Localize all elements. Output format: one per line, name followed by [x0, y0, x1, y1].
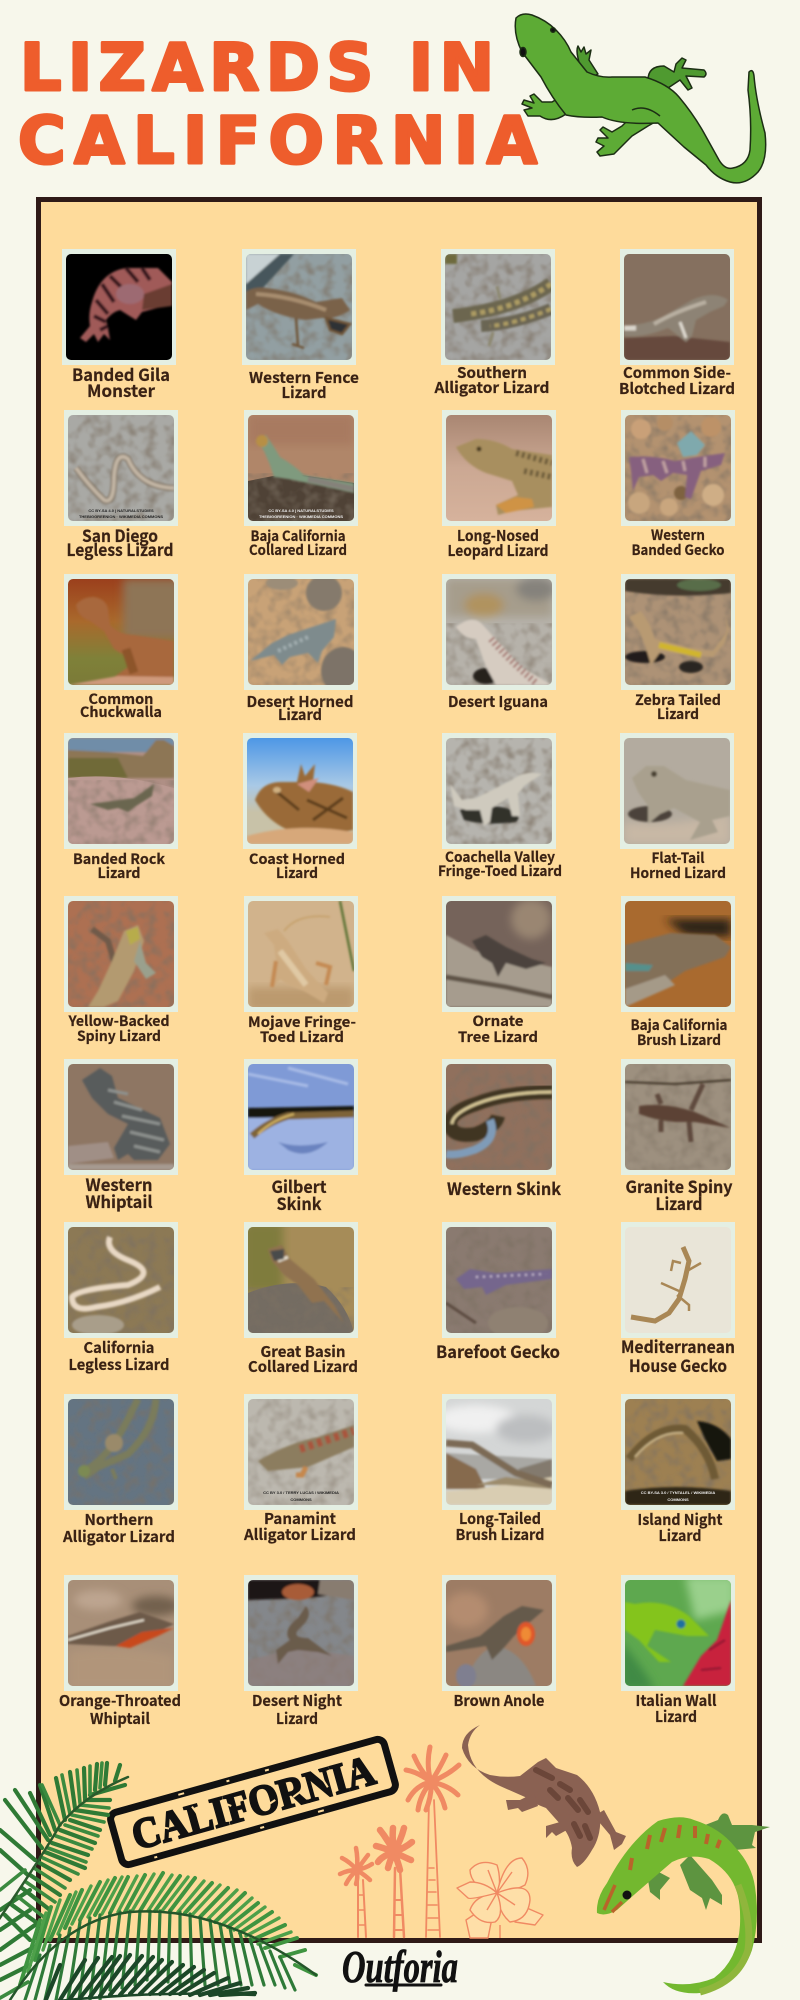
caption: House Gecko	[629, 1353, 727, 1377]
caption: Lizard	[276, 1708, 318, 1729]
caption: Panamint	[264, 1508, 337, 1529]
caption: Banded Gecko	[632, 540, 725, 560]
stamp: California: CALIFORNIA	[127, 1747, 380, 1860]
caption: Alligator Lizard	[243, 1524, 356, 1545]
card: Long-Nosed Leopard Lizard	[442, 410, 556, 561]
caption	[248, 1341, 358, 1377]
card: Common Side-Blotched Lizard	[619, 249, 735, 399]
caption	[80, 689, 162, 722]
illustration: brown gecko	[462, 1725, 626, 1867]
caption	[635, 690, 721, 724]
caption: Whiptail	[86, 1189, 152, 1213]
caption: Lizard	[656, 1191, 702, 1215]
caption	[59, 1690, 181, 1729]
short palm	[340, 1848, 372, 1937]
photo	[244, 1059, 358, 1175]
caption	[243, 1508, 356, 1545]
caption: Lizard	[658, 1525, 702, 1546]
caption	[636, 1690, 717, 1727]
photo	[244, 1575, 358, 1691]
photo: THEBIGGREENION · WIKIMEDIA COMMONS	[259, 514, 343, 519]
caption: Alligator Lizard	[62, 1526, 175, 1547]
illustration: palm fronds	[0, 1763, 316, 2000]
photo	[620, 249, 734, 365]
caption: Long-Tailed	[459, 1508, 541, 1529]
photo: COMMONS	[667, 1497, 689, 1502]
caption: Collared Lizard	[248, 1356, 358, 1377]
card: San Diego Legless Lizard	[64, 410, 178, 561]
card: Banded Gila Monster	[62, 249, 176, 402]
card: Granite Spiny Lizard	[621, 1059, 735, 1215]
card: Desert Horned Lizard	[244, 574, 365, 725]
frond: bottom dark	[40, 1955, 255, 2000]
photo	[243, 1222, 358, 1338]
photo: CC BY-SA 4.0 | NATURALSTUDIES	[268, 508, 334, 513]
photo: CC BY 3.0 / TERRY LUCAS / WIKIMEDIA	[263, 1490, 339, 1495]
caption: Baja California	[250, 526, 346, 546]
caption	[630, 848, 726, 883]
caption: Legless Lizard	[68, 1354, 170, 1375]
caption: Zebra Tailed	[635, 690, 721, 710]
caption: Blotched Lizard	[619, 378, 735, 399]
title	[18, 31, 537, 179]
title: CALIFORNIA	[18, 104, 537, 179]
photo	[621, 1222, 735, 1338]
caption: Island Night	[638, 1509, 723, 1530]
caption: Lizard	[278, 704, 322, 725]
card: Panamint Alligator Lizard	[243, 1394, 358, 1545]
illustration: palm trees	[340, 1747, 459, 1937]
photo	[64, 410, 178, 526]
caption	[68, 1337, 170, 1375]
photo	[442, 410, 556, 526]
caption: California	[84, 1337, 154, 1358]
caption: Common	[88, 689, 154, 709]
caption	[272, 1174, 327, 1215]
card: Southern Alligator Lizard	[433, 249, 555, 398]
caption: Desert Iguana	[448, 691, 548, 712]
card: Western Banded Gecko	[621, 410, 735, 560]
card: Brown Anole	[442, 1575, 556, 1711]
photo	[442, 1575, 556, 1691]
caption: Tree Lizard	[458, 1027, 538, 1047]
card: Northern Alligator Lizard	[62, 1394, 178, 1547]
frond: upper left	[0, 1763, 128, 1998]
card: Italian Wall Lizard	[620, 1575, 735, 1727]
caption: Mojave Fringe-	[248, 1012, 356, 1032]
caption: Lizard	[98, 863, 140, 883]
caption: Horned Lizard	[630, 863, 726, 883]
caption: Lizard	[657, 704, 699, 724]
icon: green lizard top right	[515, 14, 766, 183]
caption: Fringe-Toed Lizard	[438, 861, 562, 881]
photo	[244, 574, 365, 695]
caption: Flat-Tail	[652, 848, 705, 868]
caption: Leopard Lizard	[448, 540, 548, 561]
caption: Great Basin	[260, 1341, 346, 1362]
card: Orange-Throated Whiptail	[59, 1575, 181, 1729]
caption: Banded Rock	[73, 849, 166, 869]
caption	[249, 367, 359, 403]
caption	[458, 1011, 538, 1047]
caption: Western	[86, 1172, 152, 1196]
card: Desert Night Lizard	[244, 1575, 358, 1729]
photo	[621, 574, 735, 690]
caption: Legless Lizard	[66, 537, 174, 561]
caption	[246, 691, 354, 725]
card: Desert Iguana	[442, 574, 556, 712]
caption: Desert Night	[252, 1690, 343, 1711]
caption: Ornate	[472, 1011, 524, 1031]
card: Coachella Valley Fringe-Toed Lizard	[438, 733, 562, 881]
caption: Lizard	[276, 863, 318, 883]
caption	[621, 1334, 735, 1377]
caption	[632, 525, 725, 560]
caption	[72, 362, 170, 402]
caption	[433, 362, 550, 398]
card: California Legless Lizard	[64, 1222, 178, 1375]
caption: Desert Horned	[246, 691, 354, 712]
card: Baja California Collared Lizard	[244, 410, 358, 560]
caption: Italian Wall	[636, 1690, 717, 1711]
photo: CC BY-SA 4.0 | NATURALSTUDIES	[88, 508, 154, 513]
card: Zebra Tailed Lizard	[621, 574, 735, 724]
caption: Long-Nosed	[457, 525, 539, 546]
photo	[441, 249, 555, 365]
card: Flat-Tail Horned Lizard	[620, 733, 734, 883]
panel: lizard grid background	[38, 200, 760, 1940]
card: Great Basin Collared Lizard	[243, 1222, 358, 1377]
card: Ornate Tree Lizard	[442, 896, 556, 1047]
card: Baja California Brush Lizard	[621, 896, 735, 1050]
caption: Coast Horned	[249, 849, 345, 869]
caption	[630, 1015, 728, 1050]
photo	[64, 1059, 178, 1175]
caption: Western Fence	[249, 367, 359, 388]
photo	[64, 1575, 180, 1691]
caption: Alligator Lizard	[433, 377, 550, 398]
caption	[456, 1508, 544, 1545]
photo	[442, 574, 556, 690]
photo	[442, 1222, 556, 1339]
caption: Banded Gila	[72, 362, 170, 386]
caption	[73, 849, 166, 883]
card: Yellow-Backed Spiny Lizard	[64, 896, 178, 1046]
photo	[64, 1394, 178, 1510]
caption: Lizard	[655, 1706, 697, 1727]
caption	[638, 1509, 723, 1546]
photo	[242, 249, 356, 365]
caption	[626, 1174, 733, 1215]
card: Western Fence Lizard	[242, 249, 359, 403]
caption: Coachella Valley	[445, 847, 555, 867]
photo	[436, 1394, 556, 1510]
caption: Skink	[276, 1191, 322, 1215]
card: Island Night Lizard	[621, 1394, 735, 1546]
frond: middle arching	[10, 1873, 316, 2000]
card: Mojave Fringe-Toed Lizard	[244, 896, 358, 1047]
caption	[252, 1690, 343, 1729]
caption: Brush Lizard	[637, 1030, 721, 1050]
photo	[621, 1059, 735, 1175]
caption: Spiny Lizard	[77, 1026, 161, 1046]
caption: San Diego	[82, 523, 158, 547]
card: Western Skink	[442, 1059, 561, 1200]
photo	[244, 896, 358, 1012]
photo	[442, 733, 556, 849]
caption	[66, 523, 174, 561]
caption: Southern	[457, 362, 527, 383]
card: Banded Rock Lizard	[64, 733, 178, 883]
card: Mediterranean House Gecko	[621, 1222, 735, 1377]
photo	[64, 1222, 178, 1338]
card: Western Whiptail	[64, 1059, 178, 1213]
tall palm	[406, 1747, 459, 1937]
caption: Gilbert	[272, 1174, 327, 1198]
photo	[620, 733, 734, 849]
caption	[619, 362, 735, 399]
caption: Mediterranean	[621, 1334, 735, 1358]
photo	[442, 896, 556, 1012]
photo	[243, 733, 357, 849]
caption	[249, 526, 347, 560]
caption: Northern	[84, 1509, 154, 1530]
card: Barefoot Gecko	[436, 1222, 560, 1363]
illustration: hibiscus flower	[457, 1858, 543, 1938]
caption: Brown Anole	[454, 1690, 545, 1711]
photo	[64, 733, 178, 849]
card: Common Chuckwalla	[64, 574, 183, 722]
caption	[67, 1011, 170, 1046]
caption: Orange-Throated	[59, 1690, 181, 1711]
caption: Baja California	[630, 1015, 728, 1035]
caption: Yellow-Backed	[67, 1011, 170, 1031]
caption: Lizard	[282, 382, 326, 403]
card: Long-Tailed Brush Lizard	[436, 1394, 556, 1545]
card: Gilbert Skink	[244, 1059, 358, 1215]
caption: Monster	[87, 378, 156, 402]
photo	[621, 896, 735, 1012]
photo	[442, 1059, 556, 1175]
photo: THEBIGGREENION · WIKIMEDIA COMMONS	[79, 514, 163, 519]
photo	[621, 410, 735, 526]
caption: Western	[651, 525, 705, 545]
caption: Collared Lizard	[249, 540, 347, 560]
middle palm	[376, 1828, 412, 1937]
caption	[438, 847, 562, 881]
caption: Chuckwalla	[80, 702, 162, 722]
photo	[244, 1394, 358, 1510]
caption	[62, 1509, 175, 1547]
caption: Whiptail	[90, 1708, 150, 1729]
caption: Western Skink	[447, 1176, 561, 1200]
photo: CC BY-SA 3.0 / TYNTALEL / WIKIMEDIA	[641, 1490, 715, 1495]
caption: Brush Lizard	[456, 1524, 544, 1545]
logo: Outforia: Outforia	[342, 1941, 458, 1992]
photo	[620, 1575, 735, 1691]
photo	[64, 896, 178, 1012]
photo	[62, 249, 176, 365]
caption: Toed Lizard	[260, 1027, 344, 1047]
title: LIZARDS IN	[20, 31, 494, 106]
caption	[249, 849, 345, 883]
illustration: green gecko	[597, 1813, 770, 1993]
photo	[621, 1394, 735, 1510]
caption	[86, 1172, 152, 1213]
caption	[248, 1012, 356, 1047]
caption: Granite Spiny	[626, 1174, 733, 1198]
caption: Barefoot Gecko	[436, 1339, 560, 1363]
photo: COMMONS	[290, 1497, 312, 1502]
caption: Common Side-	[623, 362, 731, 383]
photo	[244, 410, 358, 526]
card: Coast Horned Lizard	[243, 733, 357, 883]
caption	[448, 525, 548, 561]
photo	[64, 574, 183, 690]
